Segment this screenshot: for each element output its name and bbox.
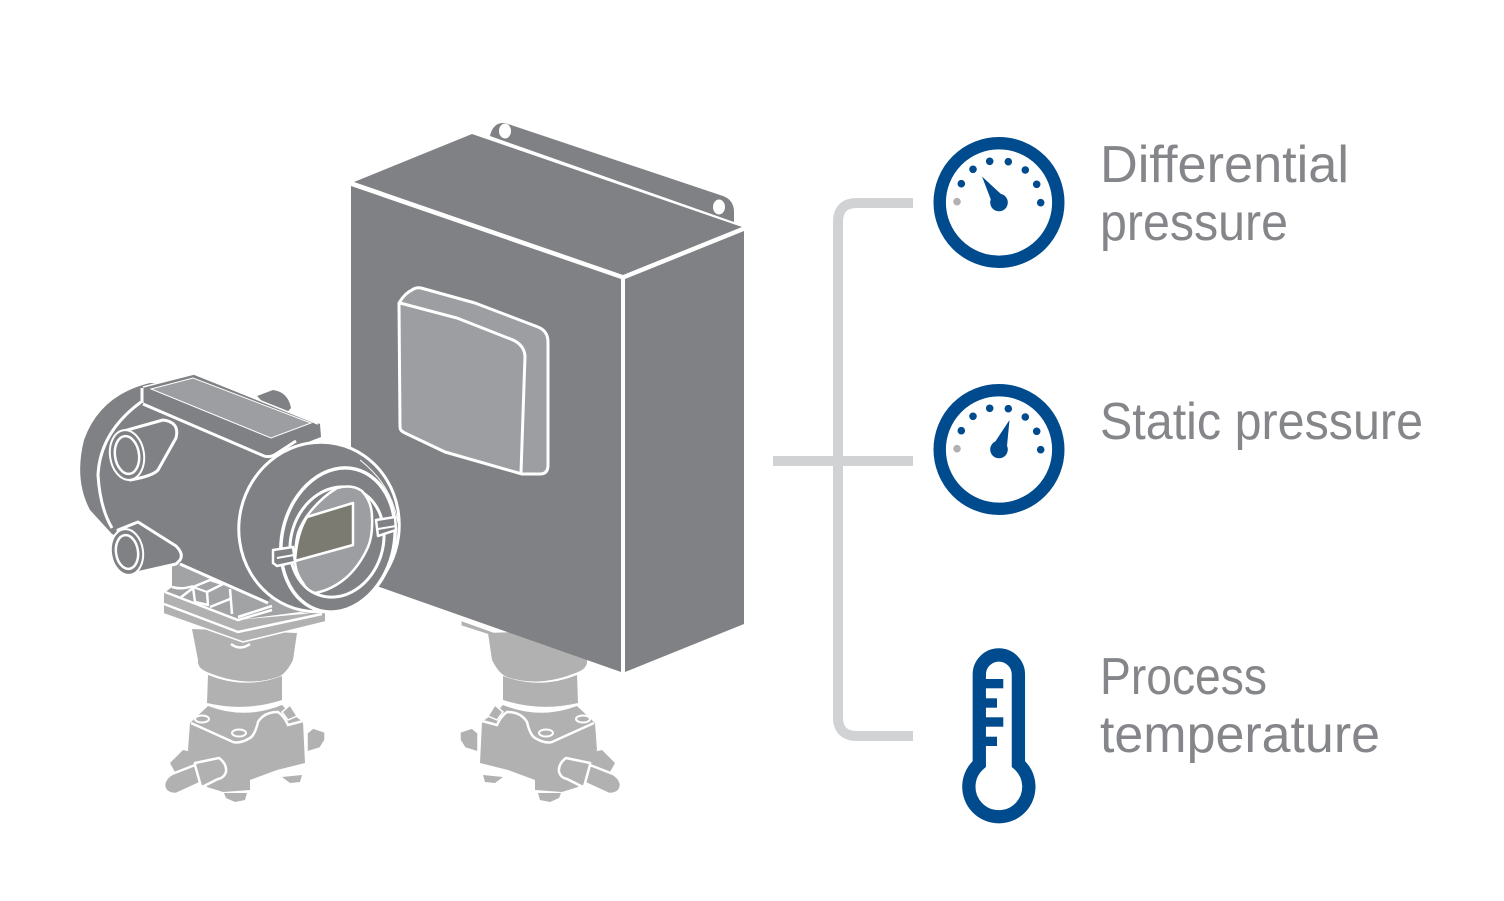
front housing ring [223,427,415,627]
label: differential pressure: Differential [1100,136,1349,194]
right transmitter base [460,622,621,802]
upper conduit [107,420,177,482]
label: process temperature [1100,648,1380,764]
top plate [142,374,321,457]
label: process temperature: temperature [1100,706,1380,764]
icon: thermometer [969,655,1029,817]
mounting ear [490,123,734,222]
enclosure box [351,123,744,672]
terminal block [193,580,223,605]
box top face [354,134,742,275]
rear knob [257,390,291,420]
display [295,503,353,561]
left clip [273,547,295,566]
right clip [376,517,396,536]
window [399,288,548,474]
box front face [351,186,621,672]
bracket connector [773,203,913,736]
icon: static pressure gauge [940,390,1058,509]
label: process temperature: Process [1100,648,1267,706]
label: differential pressure [1100,136,1349,252]
icon: differential pressure gauge [940,143,1058,262]
left transmitter head [80,374,415,627]
rear cap seam [98,402,141,528]
label: static pressure: Static pressure [1100,393,1423,451]
box right face [625,231,744,672]
front bezel [266,456,410,624]
glass [295,487,372,593]
rear cap and body [80,383,320,603]
left transmitter base [164,562,325,802]
label: differential pressure: pressure [1100,194,1288,252]
inner ring [276,475,398,609]
mounting plate [164,593,325,642]
lower conduit [108,522,181,577]
